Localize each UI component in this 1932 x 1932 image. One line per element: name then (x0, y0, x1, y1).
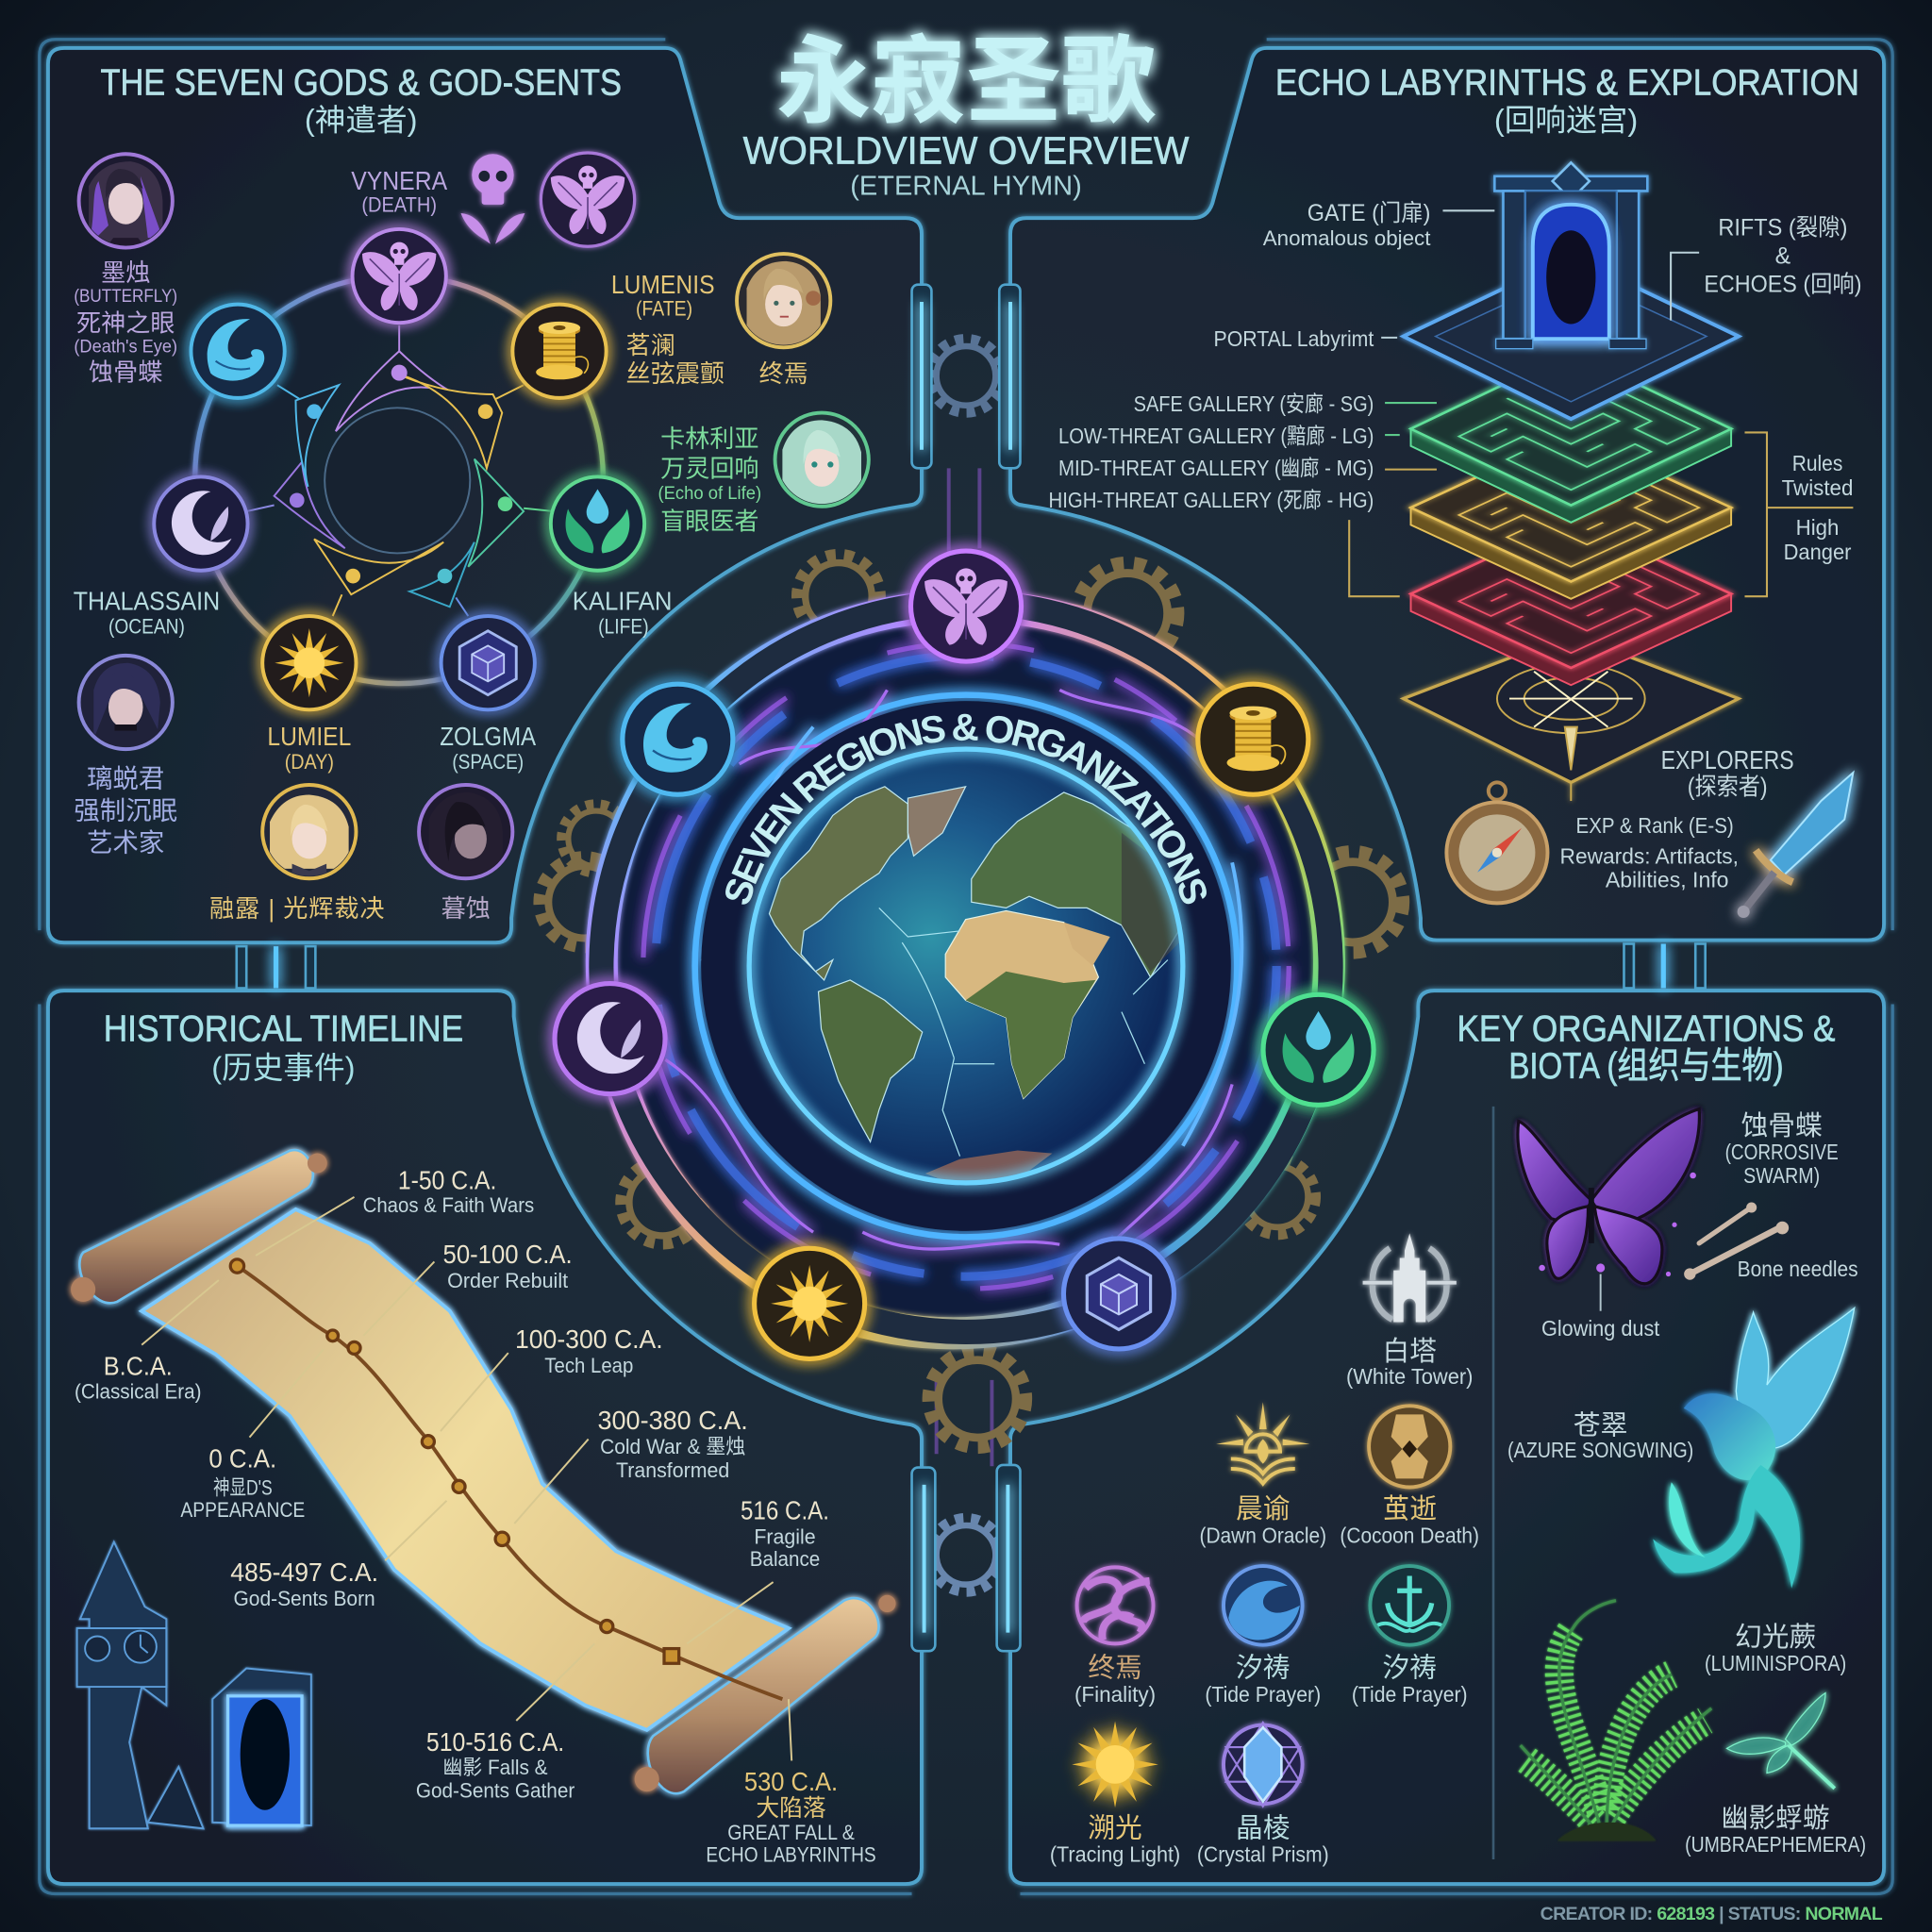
org label: crystal prism: 晶棱 (1236, 1813, 1290, 1843)
medallion fate (512, 305, 607, 398)
text: butterfly god-sent: 蚀骨蝶 (89, 358, 162, 387)
biota labels: 苍翠 (1574, 1410, 1627, 1441)
biota labels: 幻光蕨 (1735, 1623, 1816, 1653)
gate label: GATE (门扉) (1307, 200, 1430, 226)
biota labels: Glowing dust (1541, 1316, 1660, 1341)
illustration: luminispora fern (1521, 1601, 1711, 1840)
illustration: azure songwing (1653, 1307, 1855, 1589)
org label: tide prayer blue: (Tide Prayer) (1205, 1682, 1321, 1707)
org icon: crystal prism (1224, 1723, 1303, 1807)
timeline labels: Tech Leap (544, 1354, 633, 1377)
africa (945, 910, 1098, 1098)
timeline labels: Balance (750, 1547, 820, 1571)
timeline labels: Cold War & 墨烛 (600, 1435, 745, 1458)
text: butterfly god-sent: 墨烛 (101, 258, 150, 287)
text band (725, 725, 1207, 1207)
text: butterfly god-sent: (Death's Eye) (74, 337, 177, 358)
biota labels (1507, 1111, 1866, 1857)
icon: skull with wings (460, 154, 525, 244)
timeline labels: 300-380 C.A. (597, 1406, 748, 1435)
god wheel (154, 229, 644, 709)
illustration: umbraephemera dragonfly (1727, 1693, 1835, 1789)
org label: tide prayer anchor: (Tide Prayer) (1352, 1682, 1468, 1707)
south america (819, 980, 923, 1141)
illustration: dark gate (212, 1668, 311, 1825)
label: Zolgma: ZOLGMA (440, 722, 537, 751)
label: Zolgma god-sent: 暮蚀 (441, 894, 491, 923)
timeline labels: 516 C.A. (741, 1495, 829, 1524)
curved title (748, 741, 1184, 908)
heading: echo labyrinths (1275, 63, 1859, 137)
ring segments (602, 607, 1329, 1333)
biota labels: (UMBRAEPHEMERA) (1685, 1832, 1866, 1857)
biota labels: 幽影蜉蝣 (1722, 1804, 1830, 1834)
icon: sword (1738, 773, 1853, 918)
timeline labels: God-Sents Born (234, 1587, 375, 1610)
gallery labels: LOW-THREAT GALLERY (黯廊 - LG) (1058, 424, 1374, 448)
text: butterfly god-sent (74, 258, 177, 387)
medallion moon (154, 476, 248, 571)
org label: tide prayer anchor: 汐祷 (1382, 1654, 1437, 1684)
rifts label: RIFTS (裂隙) (1718, 214, 1848, 241)
energy swirl (643, 643, 1289, 1289)
timeline labels: 1-50 C.A. (398, 1165, 496, 1194)
label: Zolgma (440, 722, 537, 774)
title: 永寂圣歌 (776, 27, 1156, 135)
timeline labels: Chaos & Faith Wars (363, 1193, 534, 1217)
org icon: dawn oracle (1216, 1402, 1309, 1484)
medallion ocean (191, 305, 285, 398)
org label: cocoon death: 茧逝 (1382, 1494, 1437, 1524)
central medallion day (755, 1248, 865, 1358)
heading: seven gods: THE SEVEN GODS & GOD-SENTS (100, 63, 622, 104)
org label: dawn oracle: (Dawn Oracle) (1200, 1523, 1326, 1547)
label: Lumiel (267, 722, 351, 774)
illustration: ruined clock tower (77, 1542, 311, 1828)
portrait: Thalassain (79, 656, 173, 749)
explorers text: EXP & Rank (E-S) (1576, 813, 1734, 838)
leader lines labyrinth (1349, 210, 1853, 596)
danger notes (1782, 451, 1853, 564)
globe (751, 751, 1185, 1182)
connectors between panels (237, 285, 1706, 1651)
org icon: tide prayer blue (1224, 1566, 1303, 1645)
label: Lumenis: LUMENIS (611, 270, 715, 299)
panel: echo labyrinths (1010, 40, 1892, 941)
org label: tide prayer blue (1205, 1654, 1321, 1707)
text: Thalassain god-sent: 强制沉眠 (74, 796, 177, 825)
timeline labels: God-Sents Gather (416, 1779, 575, 1803)
portal opening (1533, 205, 1609, 339)
timeline labels: (Classical Era) (75, 1379, 202, 1403)
text: Thalassain god-sent: 艺术家 (87, 828, 164, 858)
central globe system (502, 516, 1441, 1483)
panel: key organizations (1010, 991, 1892, 1894)
rifts label (1704, 214, 1862, 298)
portal label: PORTAL Labyrimt (1214, 326, 1374, 351)
title (743, 27, 1190, 201)
label: Thalassain (74, 587, 220, 638)
label: Kalifan god-sent: (Echo of Life) (658, 483, 761, 504)
danger notes: Danger (1784, 540, 1852, 564)
panel: central connector circuitry (929, 339, 1003, 1466)
label: Vynera: (DEATH) (361, 193, 437, 217)
label: Kalifan: (LIFE) (598, 614, 649, 638)
antarctica (925, 1151, 1052, 1182)
gate label (1263, 200, 1430, 250)
timeline labels: 大陷落 (756, 1795, 826, 1822)
timeline labels: 幽影 Falls & (443, 1756, 548, 1779)
central medallion space (1063, 1239, 1174, 1349)
label: Lumenis: (FATE) (636, 296, 692, 320)
portal platform (1404, 257, 1739, 419)
explorers text: Abilities, Info (1606, 867, 1728, 891)
label: Lumiel: LUMIEL (267, 722, 351, 751)
central medallion fate (1198, 684, 1308, 794)
gear connector bottom (929, 1518, 1003, 1592)
org label: dawn oracle: 晨谕 (1236, 1494, 1291, 1524)
label: Vynera: VYNERA (351, 166, 448, 195)
icon: compass (1446, 782, 1547, 903)
org label: tide prayer anchor (1352, 1654, 1468, 1707)
gears behind ring (540, 555, 1403, 1447)
label: Lumiel: (DAY) (285, 750, 334, 774)
scroll paper (142, 1209, 789, 1730)
north america (769, 787, 908, 980)
org label: dawn oracle (1200, 1494, 1326, 1547)
org label: finality: 终焉 (1088, 1654, 1142, 1684)
greenland (908, 787, 966, 856)
portrait: Kalifan (775, 413, 869, 507)
gallery labels (1049, 391, 1374, 512)
heading: timeline: (历史事件) (211, 1050, 356, 1085)
org label: crystal prism (1197, 1813, 1329, 1867)
labyrinth layer gold (1411, 434, 1731, 599)
org label: finality (1074, 1654, 1156, 1707)
heading: key organizations: KEY ORGANIZATIONS & (1457, 1009, 1835, 1050)
label: Thalassain: THALASSAIN (74, 587, 220, 616)
label: Kalifan god-sent: 盲眼医者 (660, 508, 759, 536)
label: Lumiel god-sent: 融露 | 光辉裁决 (209, 894, 385, 923)
timeline labels: 100-300 C.A. (515, 1324, 663, 1354)
heading: echo labyrinths: ECHO LABYRINTHS & EXPLORATION (1275, 63, 1859, 104)
label: Lumenis: 终焉 (759, 359, 808, 388)
gallery labels: MID-THREAT GALLERY (幽廊 - MG) (1058, 456, 1374, 480)
org label: tracing light (1050, 1813, 1180, 1867)
timeline labels: B.C.A. (104, 1352, 173, 1381)
central medallion life (1263, 994, 1374, 1105)
heading: timeline (104, 1009, 463, 1085)
biota labels: SWARM) (1743, 1163, 1820, 1188)
biota labels: (LUMINISPORA) (1705, 1651, 1846, 1675)
explorers text: (探索者) (1688, 772, 1768, 800)
timeline labels: ECHO LABYRINTHS (706, 1843, 876, 1867)
heading: echo labyrinths: (回响迷宫) (1494, 102, 1638, 137)
heading: seven gods (100, 63, 622, 137)
wheel ring (195, 276, 603, 684)
timeline labels: APPEARANCE (180, 1498, 305, 1522)
explorers text (1560, 745, 1794, 891)
org label: white tower: 白塔 (1382, 1337, 1437, 1367)
org label: cocoon death: (Cocoon Death) (1340, 1523, 1479, 1547)
divider (1492, 1107, 1494, 1859)
illustration: bone needles (1684, 1203, 1789, 1279)
org label: finality: (Finality) (1074, 1682, 1156, 1707)
central globe system: SEVEN REGIONS & ORGANIZATIONS (725, 713, 1207, 905)
portrait: moth (79, 154, 173, 248)
central medallion death (910, 551, 1022, 661)
label: Kalifan god-sent: 万灵回响 (660, 454, 759, 482)
timeline labels: GREAT FALL & (727, 1821, 855, 1844)
subtitle: WORLDVIEW OVERVIEW (743, 129, 1190, 173)
medallion space (441, 616, 535, 709)
gate (1494, 162, 1647, 349)
medallion death (353, 229, 446, 323)
icon: butterfly badge (541, 153, 635, 246)
heading: seven gods: (神遣者) (305, 102, 418, 137)
gallery labels: SAFE GALLERY (安廊 - SG) (1134, 391, 1374, 416)
danger notes: Rules (1792, 451, 1842, 475)
footer status: CREATOR ID: 628193 | STATUS: NORMAL (1541, 1904, 1883, 1924)
org label: cocoon death (1340, 1494, 1479, 1547)
label: Lumenis: 茗澜 (626, 331, 675, 359)
biota labels: 蚀骨蝶 (1741, 1111, 1823, 1141)
label: Lumenis (611, 270, 808, 388)
danger notes: Twisted (1782, 475, 1853, 500)
explorers text: EXPLORERS (1661, 745, 1794, 774)
timeline labels: 0 C.A. (208, 1444, 276, 1474)
central medallion ocean (623, 684, 733, 794)
label: Zolgma: (SPACE) (452, 750, 524, 774)
org icon: tracing light (1072, 1722, 1158, 1807)
panel: historical timeline (40, 991, 922, 1894)
portrait: Zolgma (419, 785, 512, 878)
scroll top roller (71, 1150, 327, 1303)
timeline labels: 530 C.A. (744, 1767, 838, 1796)
biota labels: (CORROSIVE (1725, 1140, 1839, 1164)
org label: white tower: (White Tower) (1346, 1364, 1473, 1389)
heading: key organizations: BIOTA (组织与生物) (1508, 1046, 1784, 1087)
scroll (71, 1150, 896, 1793)
timeline labels: Transformed (616, 1458, 729, 1482)
bottom rune diamond (1404, 635, 1739, 801)
panel: the seven gods (40, 40, 922, 942)
gear connector top (929, 339, 1003, 413)
scroll bottom roller (635, 1595, 896, 1793)
org label: tracing light: (Tracing Light) (1050, 1842, 1180, 1867)
org label: tracing light: 溯光 (1088, 1813, 1142, 1843)
label: Vynera (351, 166, 448, 217)
wheel knot (246, 325, 555, 616)
timeline path (237, 1266, 782, 1699)
medallion life (551, 476, 644, 571)
timeline labels: 50-100 C.A. (443, 1240, 573, 1269)
labyrinth layer red (1411, 520, 1731, 685)
illustration: corrosive butterfly (1518, 1109, 1699, 1311)
text: butterfly god-sent: (BUTTERFLY) (74, 286, 177, 307)
heading: key organizations (1457, 1009, 1835, 1087)
timeline labels: 神显D'S (213, 1475, 273, 1499)
medallion day (262, 616, 356, 709)
timeline labels: 485-497 C.A. (230, 1557, 378, 1587)
portrait: Lumiel (262, 785, 356, 881)
label: Kalifan (573, 587, 672, 638)
label: Lumenis: 丝弦震颤 (626, 359, 724, 388)
org label: white tower (1346, 1337, 1473, 1389)
org icon: cocoon death (1369, 1406, 1450, 1487)
heading: timeline: HISTORICAL TIMELINE (104, 1009, 463, 1050)
gate label: Anomalous object (1263, 226, 1430, 250)
org icon: tide prayer anchor (1370, 1566, 1449, 1645)
portrait: Lumenis (737, 254, 830, 347)
globe rim (749, 749, 1183, 1183)
text: butterfly god-sent: 死神之眼 (76, 308, 175, 337)
subtitle chinese: (ETERNAL HYMN) (850, 171, 1082, 201)
ring disc (615, 616, 1317, 1319)
biota labels: Bone needles (1738, 1257, 1858, 1281)
central medallion moon (555, 984, 665, 1094)
text: Thalassain god-sent: 璃蜕君 (87, 764, 164, 793)
label: Kalifan god-sent (658, 425, 761, 536)
org label: crystal prism: (Crystal Prism) (1197, 1842, 1329, 1867)
timeline labels: Fragile (754, 1525, 816, 1549)
org icon: white tower (1363, 1233, 1457, 1322)
text: Thalassain god-sent (74, 764, 177, 858)
danger notes: High (1796, 515, 1839, 540)
label: Kalifan: KALIFAN (573, 587, 672, 616)
timeline labels: Order Rebuilt (447, 1269, 568, 1292)
rifts label: & (1775, 244, 1791, 270)
rifts label: ECHOES (回响) (1704, 272, 1862, 298)
biota labels: (AZURE SONGWING) (1507, 1438, 1693, 1462)
org label: tide prayer blue: 汐祷 (1236, 1654, 1290, 1684)
label: Thalassain: (OCEAN) (108, 614, 185, 638)
org icon: finality (1077, 1567, 1154, 1643)
timeline labels (75, 1165, 876, 1867)
leader lines (142, 1197, 791, 1760)
labyrinth layer green (1411, 353, 1731, 523)
timeline labels: 510-516 C.A. (426, 1727, 564, 1757)
gallery labels: HIGH-THREAT GALLERY (死廊 - HG) (1049, 488, 1374, 512)
explorers text: Rewards: Artifacts, (1560, 844, 1739, 869)
label: Kalifan god-sent: 卡林利亚 (660, 425, 759, 453)
eurasia (972, 792, 1182, 977)
